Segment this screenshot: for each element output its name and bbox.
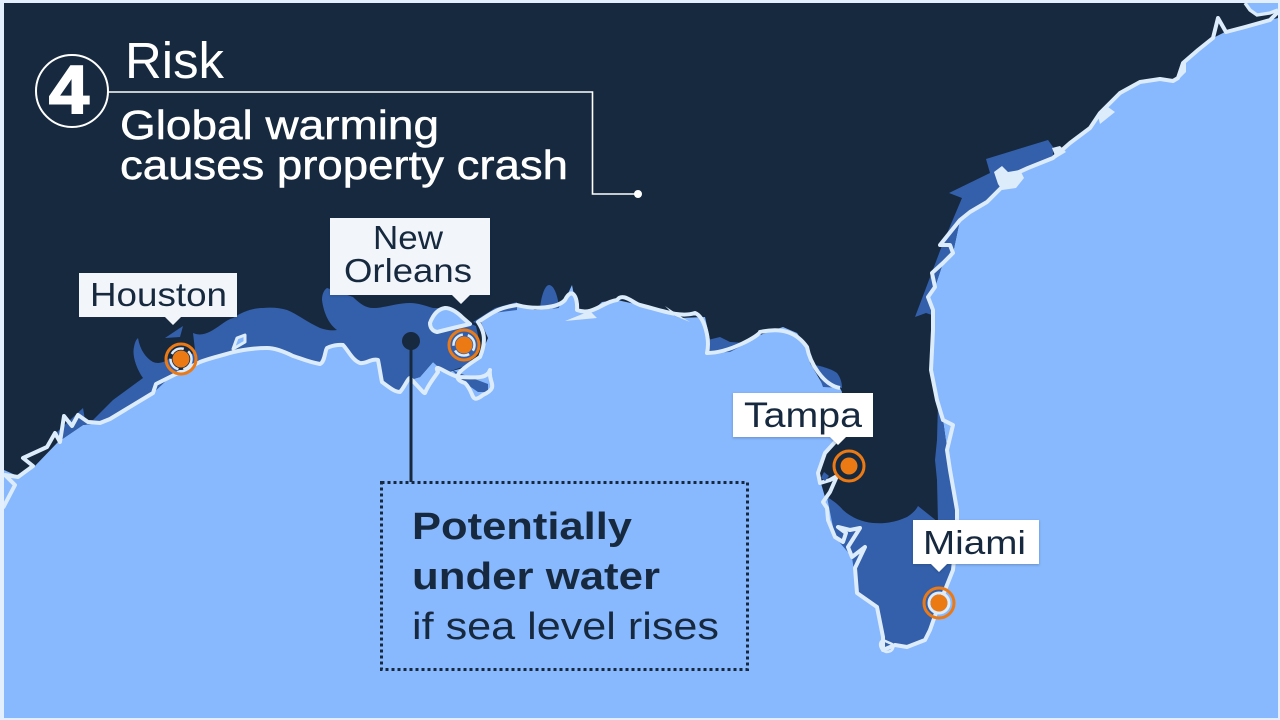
city: Tampa <box>733 393 873 481</box>
subtitle: causes property crash <box>120 142 568 188</box>
heading: Risk: Risk <box>125 32 224 89</box>
callout: potentially under water <box>382 482 748 670</box>
coastline: Florida Keys loop <box>880 640 893 652</box>
number badge: 4 <box>49 52 89 128</box>
city: Tampa: Tampa <box>744 396 863 435</box>
coastline: Lake Pontchartrain <box>430 308 470 332</box>
callout: potentially under water: under water <box>412 556 660 598</box>
number badge <box>36 52 108 128</box>
flood zone: Houston inlet <box>165 326 183 338</box>
land <box>4 3 1278 530</box>
flood zone: south Florida <box>827 403 957 650</box>
flood zone: Mississippi coast <box>473 302 517 323</box>
city: Miami <box>913 520 1039 618</box>
coastline: Big Bend spits <box>565 306 690 322</box>
coastline: Florida <box>818 12 1278 650</box>
city: Houston <box>79 273 237 374</box>
city: Houston: Houston <box>90 276 227 313</box>
city: New Orleans: Orleans <box>344 252 472 289</box>
city: New Orleans <box>330 218 490 360</box>
city: Miami: Miami <box>923 524 1026 561</box>
flood zone: Atlantic coast <box>915 140 1053 317</box>
flood zone: Big Bend <box>815 365 842 388</box>
flood zone: Texas and Louisiana <box>57 288 480 442</box>
coastline: top right inlet <box>1245 3 1278 15</box>
subtitle: Global warming <box>120 102 439 148</box>
coastline: Gulf <box>3 293 840 508</box>
callout: potentially under water: if sea level rises <box>412 606 719 648</box>
callout leader <box>402 332 420 482</box>
coastline: small lake near Houston <box>233 335 245 349</box>
flood zone: Alabama bump <box>540 285 559 309</box>
flood zone: Florida panhandle <box>710 337 741 352</box>
coastline: island blobs <box>994 60 1186 190</box>
coastline: Tampa bay island <box>821 472 829 481</box>
subtitle <box>120 102 568 188</box>
leader line: title to coast <box>108 92 642 198</box>
city: New Orleans: New <box>373 219 443 256</box>
callout: potentially under water: Potentially <box>412 506 632 548</box>
flood zone: Mississippi delta <box>452 370 488 392</box>
